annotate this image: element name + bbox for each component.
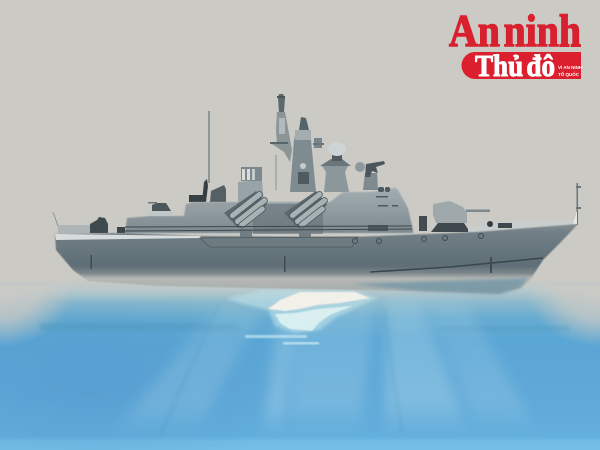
ship: midship shadow behind launchers bbox=[253, 204, 323, 234]
ship: gun mount with director bbox=[355, 161, 385, 190]
ship: hull bbox=[55, 224, 578, 294]
logo: red banner bbox=[462, 52, 581, 79]
ship: missile launcher aft bbox=[224, 190, 269, 238]
logo: Thu do wordmark: Thủ đô bbox=[475, 48, 555, 83]
ship: waterline stripe bbox=[370, 258, 543, 272]
ship: main gun turret bbox=[419, 201, 490, 232]
logo: An ninh wordmark: An ninh bbox=[449, 5, 581, 56]
warship bbox=[53, 94, 581, 294]
ship: bow flagstaff bbox=[573, 183, 581, 225]
ship: superstructure bbox=[125, 188, 413, 233]
ship: missile launcher forward bbox=[284, 190, 329, 238]
light rays bbox=[110, 300, 540, 436]
ship: keel reflection bbox=[350, 278, 528, 294]
ship: side sponson bbox=[200, 237, 358, 247]
logo: An ninh Thu do bbox=[449, 5, 582, 83]
ship: rear deckhouse upper bbox=[238, 180, 264, 204]
ship: rear sensor stack bbox=[241, 167, 262, 181]
ship: funnel tower with radar bbox=[290, 117, 322, 192]
ship: hull deck railing bbox=[125, 226, 412, 231]
logo: tagline: VÌ AN NINH bbox=[558, 63, 582, 70]
logo: tagline bbox=[558, 63, 582, 77]
ship: radio antenna bbox=[208, 111, 210, 183]
ship: foredeck rail bbox=[468, 219, 578, 232]
logo: tagline: TỔ QUỐC bbox=[558, 71, 580, 77]
ship: aft mast machinery bbox=[189, 179, 226, 202]
ship: draft marks bbox=[90, 255, 492, 273]
ship: portholes bbox=[352, 234, 484, 244]
ship: deck edge bbox=[55, 234, 201, 240]
ship: forward radar mast bbox=[313, 142, 351, 192]
ship: aft gun turret bbox=[147, 202, 175, 216]
ship: main mast bbox=[270, 94, 292, 190]
ship: stern launcher bbox=[53, 212, 125, 233]
sun glint on water bbox=[226, 290, 378, 344]
sea bbox=[0, 280, 600, 450]
ship: bridge windows bbox=[368, 187, 398, 231]
